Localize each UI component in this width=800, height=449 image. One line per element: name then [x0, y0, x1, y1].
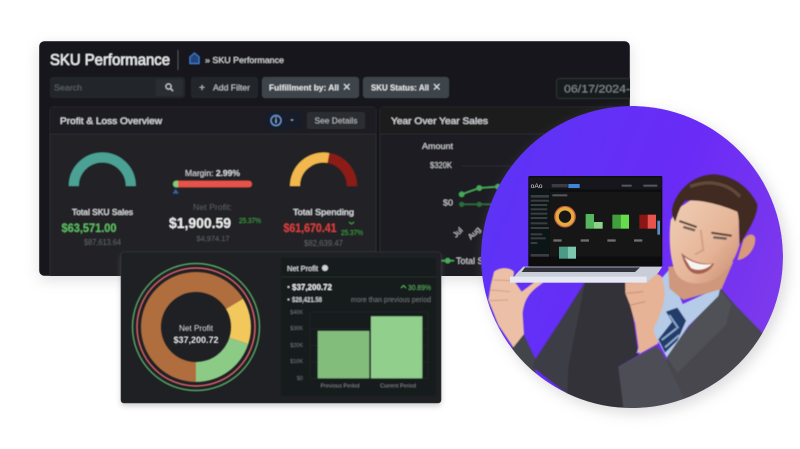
button: add filter: + [199, 82, 205, 94]
bar chart: $0 [297, 376, 303, 382]
jacket right side [663, 288, 763, 403]
metric: net profit: $1,900.59 [169, 216, 231, 232]
bar chart: Current Period [380, 384, 416, 390]
ear [737, 234, 755, 260]
axis title: Amount [422, 141, 454, 151]
smile [681, 253, 714, 274]
right hand [625, 270, 665, 354]
donut centre label: Net Profit [179, 323, 214, 333]
breadcrumb: » SKU Performance [205, 55, 284, 65]
legend: Total Sales [456, 256, 501, 266]
infographic canvas [34, 40, 792, 418]
shirt [637, 269, 721, 357]
metric: total SKU sales: Total SKU Sales [72, 208, 133, 217]
legend [441, 256, 482, 265]
photo circle: businessman holding laptop [481, 106, 787, 413]
metric: net profit [169, 202, 261, 243]
donut chart [132, 264, 260, 390]
margin bar: Margin: 2.99% [185, 168, 240, 178]
bar chart: Previous Period [321, 384, 359, 390]
jacket centre [533, 283, 638, 413]
donut centre label: $37,200.72 [174, 335, 218, 345]
heading: SKU Performance: SKU Performance [50, 52, 170, 69]
bar chart [290, 310, 428, 390]
dashboard panel: SKU Performance [39, 41, 646, 282]
laptop screen [528, 176, 662, 267]
axis labels [430, 161, 454, 208]
panel heading: Profit & Loss Overview [60, 116, 162, 127]
card: net profit donut [121, 252, 441, 406]
metric: total spending [284, 208, 363, 248]
body [488, 268, 763, 413]
metric: net profit: $4,974.17 [196, 234, 230, 243]
filter chip: fulfillment [262, 77, 359, 98]
panel heading with info icon: Net Profit [287, 264, 319, 273]
metric: total SKU sales: $87,613.64 [84, 238, 122, 247]
profit values: $28,421.58 [292, 297, 322, 304]
margin bar [173, 168, 252, 194]
metric: net profit: Net Profit: [193, 202, 232, 212]
donut centre label [174, 323, 218, 345]
businessman figure [488, 174, 763, 413]
filter chip: fulfillment: Fulfillment by: All [269, 82, 339, 92]
axis labels: $320K [430, 161, 453, 170]
panel heading: Year Over Year Sales [391, 116, 488, 127]
hair [672, 174, 757, 245]
search box [50, 77, 185, 98]
month labels [452, 226, 482, 241]
lapel [665, 289, 732, 373]
gauge: total spending [295, 158, 352, 186]
change indicator: 30.89% [408, 283, 431, 292]
panel: year over year sales [379, 106, 618, 276]
button: add filter [191, 77, 258, 98]
metric: total SKU sales [62, 208, 133, 247]
neck [668, 262, 733, 300]
button: add filter: Add Filter [213, 82, 250, 92]
metric: total spending: $61,670.41 [284, 221, 337, 235]
nose [695, 230, 703, 254]
laptop base [510, 267, 662, 283]
purple background [481, 106, 783, 408]
filter chip: SKU status [363, 77, 449, 98]
button: see details: See Details [314, 116, 358, 126]
metric: total spending: 25.37% [341, 230, 363, 237]
tie [658, 308, 686, 353]
month labels: Jul [451, 226, 465, 239]
icon: home [190, 53, 199, 64]
metric: total SKU sales: $63,571.00 [62, 221, 117, 235]
date range: 06/17/2024-07 [564, 84, 644, 96]
bar chart: $40K [290, 310, 303, 316]
gauge: total SKU sales [74, 158, 131, 186]
search box: Search [54, 82, 82, 92]
panel: net profit comparison [281, 258, 436, 396]
info dropdown [269, 114, 294, 128]
head [668, 174, 757, 300]
profit values: $37,200.72 [292, 283, 333, 292]
panel: profit and loss overview [50, 107, 376, 282]
change indicator [351, 283, 431, 304]
line chart [458, 183, 500, 208]
axis labels: $0 [443, 198, 454, 208]
left hand [488, 268, 543, 347]
left sleeve [512, 334, 536, 375]
filter chip: SKU status: SKU Status: All [371, 82, 429, 92]
bar chart: $20K [290, 343, 303, 349]
metric: net profit: 25.37% [239, 218, 261, 225]
laptop [510, 176, 662, 283]
month labels: Aug [466, 225, 482, 241]
button: see details [307, 112, 365, 129]
profit values [288, 283, 333, 304]
bar chart: $30K [290, 326, 303, 332]
change indicator: more than previous period [351, 297, 431, 304]
forearm sleeve [618, 346, 680, 408]
date range [556, 78, 646, 98]
bar chart: $10K [290, 359, 303, 365]
face [670, 198, 739, 283]
laptop screen: oAo [531, 183, 543, 190]
brows [679, 221, 732, 236]
metric: total spending: $82,639.47 [304, 239, 344, 248]
eyes [683, 227, 727, 239]
metric: total spending: Total Spending [293, 208, 354, 217]
